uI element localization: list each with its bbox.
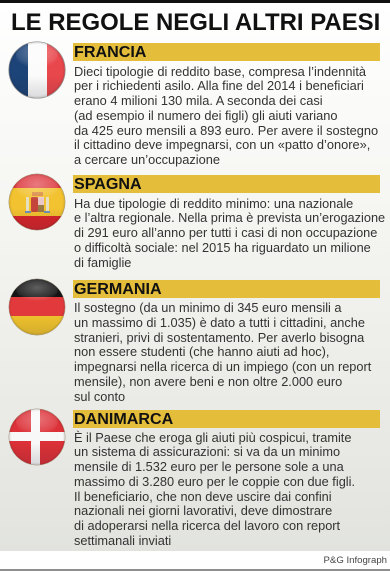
text: Danimarca: settimanali inviati — [74, 533, 171, 548]
text: Germania: mensile), non avere beni e non oltre 2.000 euro — [74, 374, 342, 389]
text: Francia: erano 4 milioni 130 mila. A seconda dei casi — [74, 93, 323, 108]
panel: Spagna — [8, 174, 385, 270]
text: Germania: non essere studenti (che hanno aiuti ad hoc), — [74, 344, 329, 359]
text: Danimarca: È il Paese che eroga gli aiuti più cospicui, tramite — [74, 430, 351, 444]
heading bar: Francia — [73, 43, 380, 61]
text: Spagna: o difficoltà sociale: nel 2015 ha riguardato un milione — [74, 240, 371, 255]
text: Danimarca: nazionali nei giorni lavorativi, deve dimostrare — [74, 503, 332, 518]
text: Germania: impegnarsi nella ricerca di un impiego (con un report — [74, 359, 371, 374]
text: Germania: stranieri, privi di sostentamento. Per averlo bisogna — [74, 330, 364, 345]
icon: Danish flag — [8, 408, 66, 466]
top rule — [0, 0, 390, 3]
text: Spagna: di 291 euro all’anno per tutti i casi di non occupazione — [74, 225, 377, 240]
heading: Danimarca: DANIMARCA — [74, 410, 173, 428]
text: Germania: Il sostegno (da un minimo di 345 euro mensili a — [74, 300, 342, 315]
text: Spagna: e l’altra regionale. Nella prima è prevista un’erogazione — [74, 210, 385, 225]
text: Danimarca: di adoperarsi nella ricerca del lavoro con report — [74, 518, 340, 533]
text: Francia: il cittadino deve impegnarsi, con un «patto d’onore», — [74, 137, 370, 152]
panel: Danimarca — [8, 408, 380, 548]
credit: P&G Infograph — [324, 555, 387, 566]
icon: German flag — [8, 278, 66, 336]
text: Danimarca: massimo di 3.280 euro per le coppie con due figli. — [74, 474, 355, 489]
text: Germania — [74, 300, 372, 404]
panel: Francia — [8, 42, 380, 167]
panel: Germania — [8, 278, 380, 404]
icon: French flag — [8, 42, 66, 98]
heading bar: Germania — [73, 280, 380, 298]
heading bar: Danimarca — [73, 410, 380, 428]
text: Germania: sul conto — [74, 389, 125, 404]
title: LE REGOLE NEGLI ALTRI PAESI — [11, 9, 380, 36]
icon: Spanish flag — [8, 174, 66, 230]
text: Francia: da 425 euro mensili a 893 euro. Per avere il sostegno — [74, 123, 378, 138]
text: Francia: per i richiedenti asilo. Alla fine del 2014 i beneficiari — [74, 78, 364, 93]
heading bar: Spagna — [73, 175, 380, 193]
text: Spagna: di famiglie — [74, 255, 131, 270]
bottom rule — [0, 569, 390, 571]
coat of arms — [25, 192, 50, 213]
text: Danimarca: mensile di 1.532 euro per le persone sole a una — [74, 459, 344, 474]
heading: Germania: GERMANIA — [74, 280, 162, 298]
text: Danimarca: un sistema di assicurazioni: si va da un minimo — [74, 444, 340, 459]
heading: Spagna: SPAGNA — [74, 175, 142, 193]
text: Francia — [74, 64, 378, 167]
text: Francia: (ad esempio il numero dei figli) gli aiuti variano — [74, 108, 338, 123]
text: Spagna: Ha due tipologie di reddito minimo: una nazionale — [74, 196, 353, 210]
text: Danimarca: Il beneficiario, che non deve uscire dai confini — [74, 489, 332, 504]
text: Francia: a cercare un’occupazione — [74, 152, 220, 167]
heading: Francia: FRANCIA — [74, 43, 146, 61]
text: Danimarca — [74, 430, 355, 548]
text: Francia: Dieci tipologie di reddito base, compresa l’indennità — [74, 64, 366, 78]
text: Spagna — [74, 196, 385, 270]
text: Germania: un massimo di 1.035) è dato a tutti i cittadini, anche — [74, 315, 365, 330]
